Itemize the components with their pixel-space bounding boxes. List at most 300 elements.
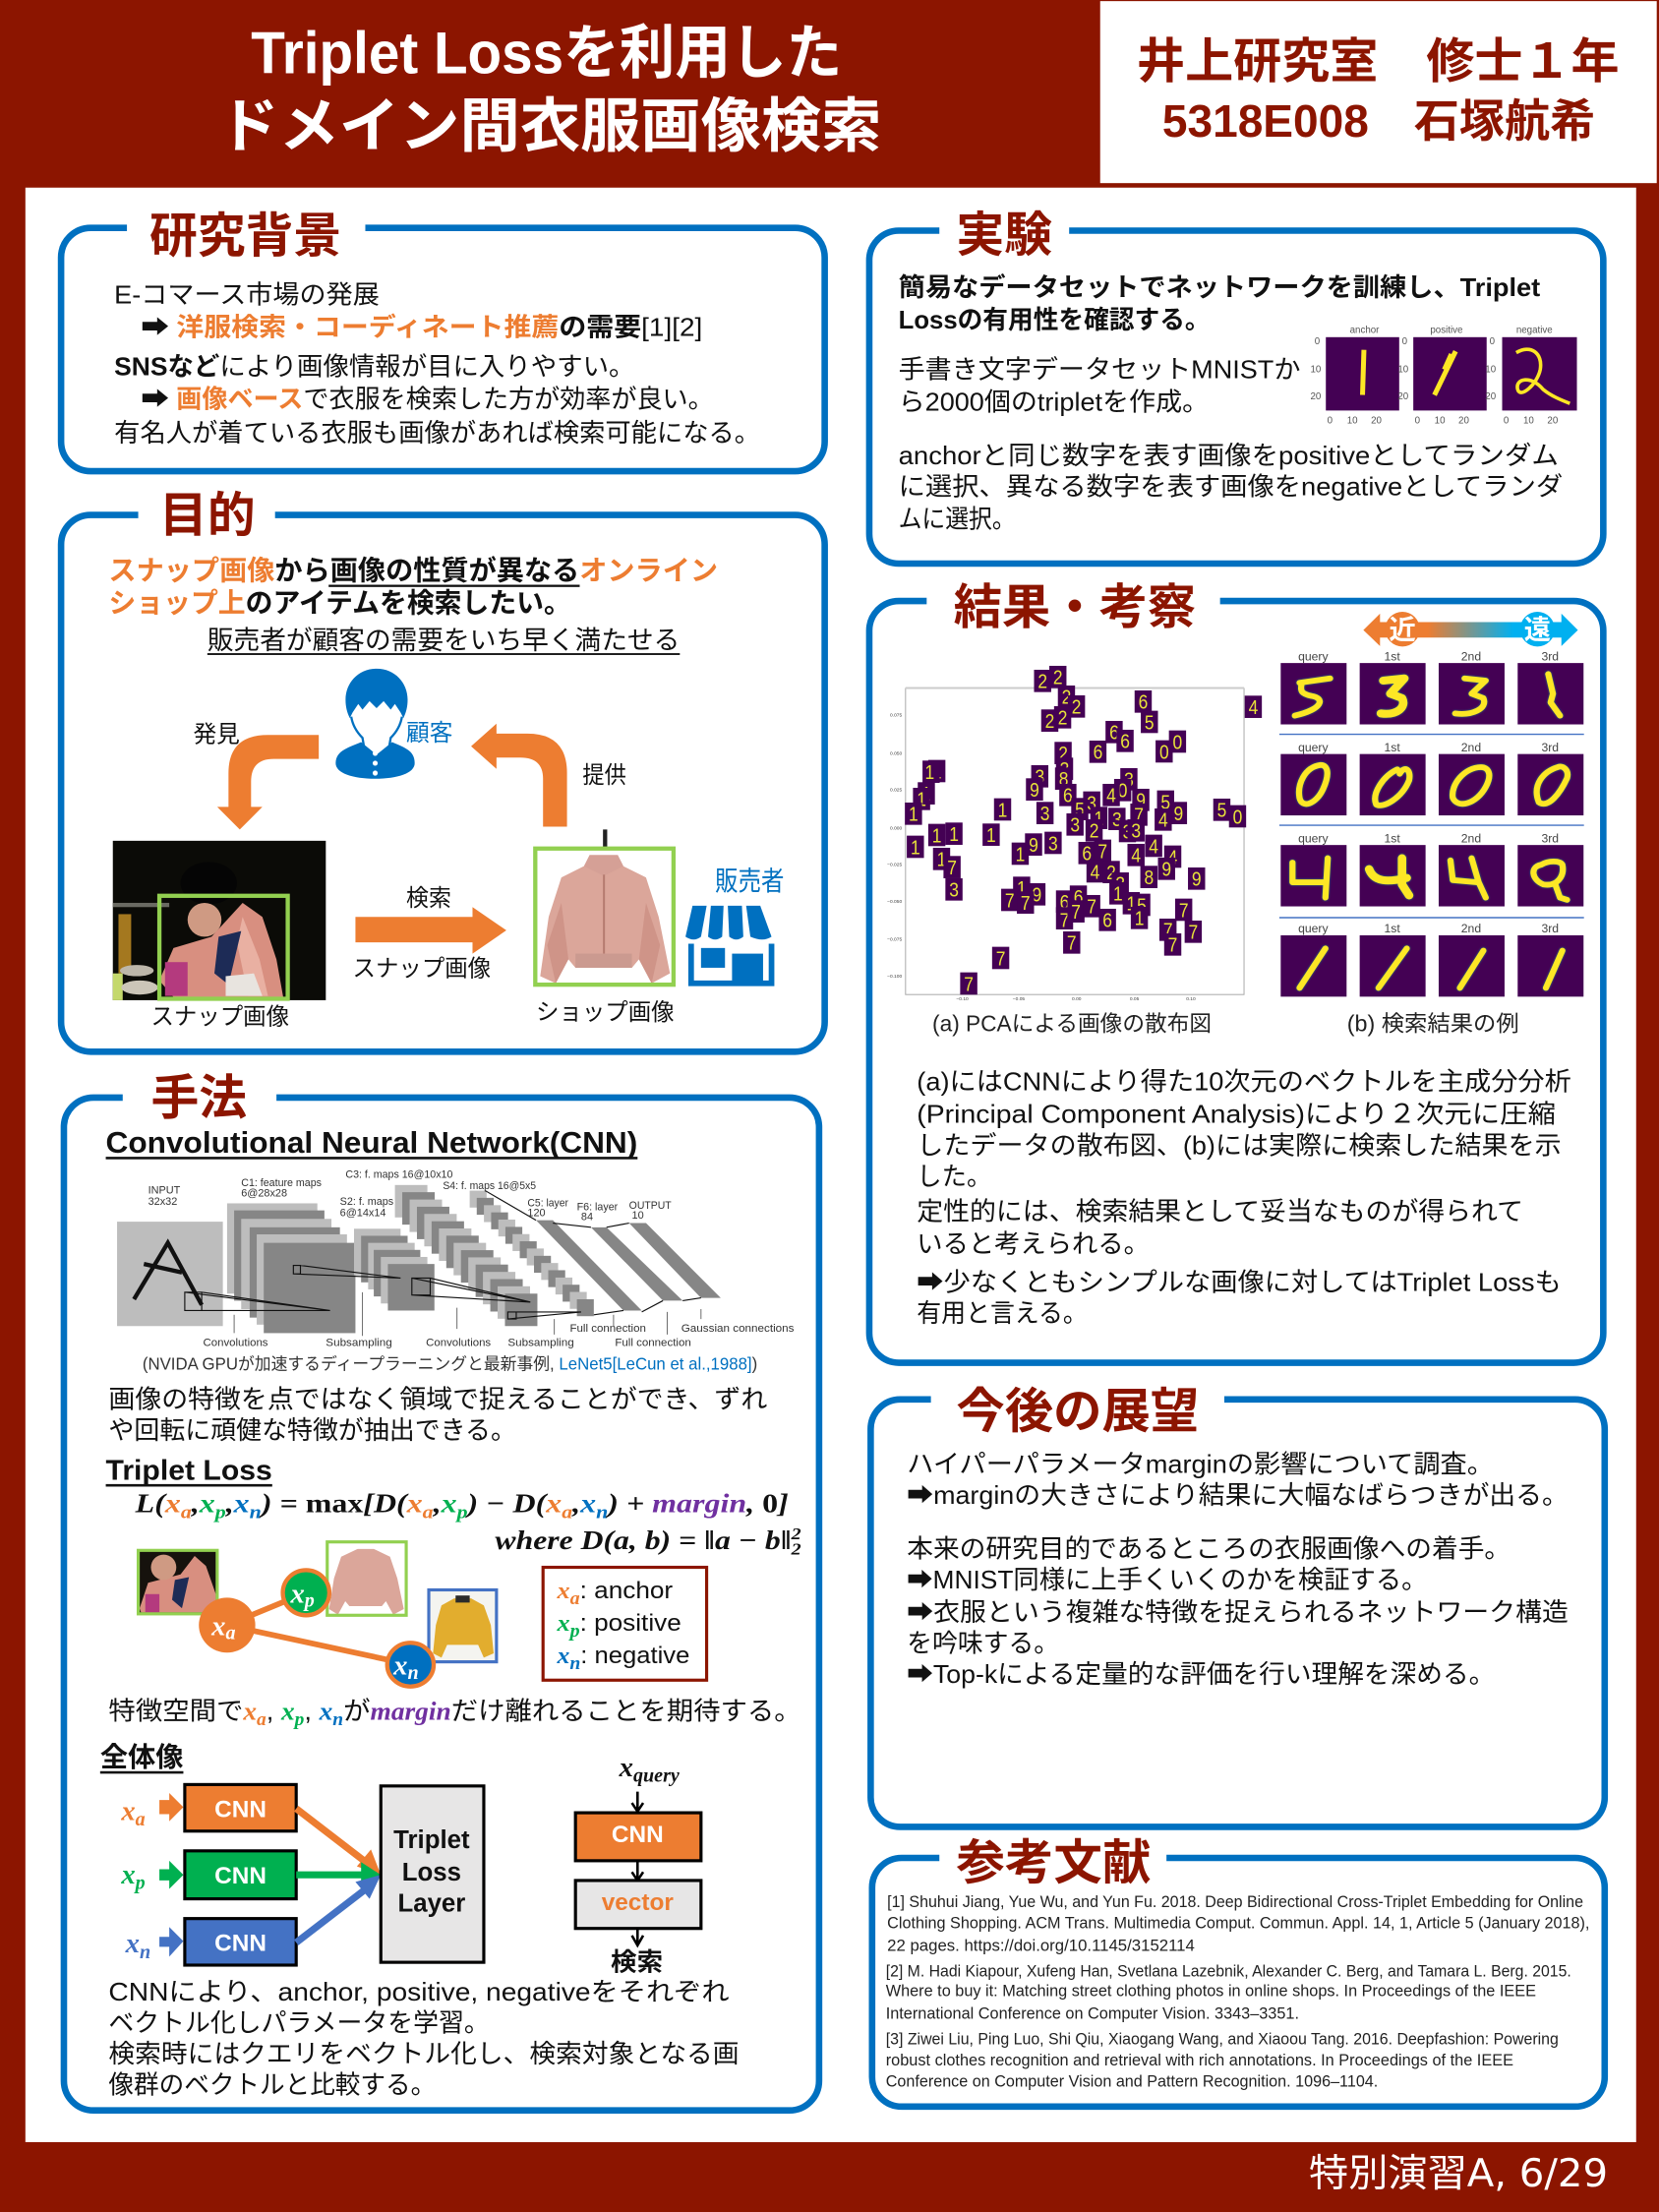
chart: LeNet5 architecture: 84 bbox=[581, 1212, 593, 1224]
formula: triplet loss: , bbox=[432, 1489, 442, 1519]
CNN blocks: CNN bbox=[214, 1796, 267, 1823]
loss layer: Loss bbox=[402, 1859, 461, 1886]
figure: MNIST triplet samples: 20 bbox=[1310, 391, 1322, 402]
heading: 目的: 目的 bbox=[159, 490, 256, 543]
chart: PCA scatter: 2 bbox=[1090, 820, 1098, 842]
figure: MNIST triplet samples: 10 bbox=[1397, 365, 1409, 376]
diagram: triplet embedding: x bbox=[290, 1578, 305, 1609]
figure: MNIST triplet samples: positive bbox=[1430, 325, 1462, 335]
legend: x bbox=[556, 1578, 580, 1609]
reference 1: 22 pages. https://doi.org/10.1145/3152114 bbox=[887, 1937, 1195, 1955]
figure: MNIST triplet samples: 20 bbox=[1371, 415, 1383, 426]
legend: x bbox=[556, 1610, 580, 1642]
chart: PCA scatter: 7 bbox=[1179, 900, 1189, 922]
text: results: したデータの散布図、(b)には実際に検索した結果を示 bbox=[917, 1130, 1562, 1160]
chart: PCA scatter: 3 bbox=[1123, 821, 1132, 843]
chart: PCA scatter: 4 bbox=[1168, 847, 1177, 868]
figure: MNIST triplet samples: 0 bbox=[1490, 336, 1496, 347]
chart: PCA scatter: 7 bbox=[1189, 922, 1198, 943]
panel: 実験 bbox=[869, 209, 1603, 564]
formula: triplet loss: a bbox=[423, 1502, 434, 1523]
row 1: query bbox=[1298, 649, 1329, 663]
heading: 全体像: 全体像 bbox=[100, 1742, 183, 1772]
arrow: near to far bbox=[1363, 612, 1578, 646]
reference 3: robust clothes recognition and retrieval with rich annotations. In Proceedings of the IEEE bbox=[886, 2051, 1513, 2069]
axis ticks: −0.025 bbox=[887, 863, 902, 868]
row 4: 2nd bbox=[1461, 922, 1481, 935]
text: network description: 検索時にはクエリをベクトル化し、検索対象となる画 bbox=[108, 2039, 740, 2068]
text: purpose bbox=[108, 555, 718, 655]
chart: PCA scatter: 2 bbox=[1072, 696, 1081, 718]
chart: PCA scatter: 1 bbox=[925, 761, 934, 784]
chart: PCA scatter: 4 bbox=[1106, 785, 1116, 807]
chart: PCA scatter: 3 bbox=[949, 879, 959, 901]
chart: LeNet5 architecture: Full connection bbox=[615, 1337, 691, 1348]
chart: PCA scatter: 4 bbox=[1249, 696, 1258, 719]
axis ticks: −0.05 bbox=[1013, 996, 1025, 1002]
formula: triplet loss bbox=[135, 1489, 801, 1559]
chart: LeNet5 architecture: Convolutions bbox=[204, 1337, 268, 1348]
reference 2 bbox=[886, 1961, 1571, 2022]
title bbox=[218, 20, 881, 159]
inputs: p bbox=[134, 1873, 146, 1894]
chart: PCA scatter: 6 bbox=[1063, 785, 1073, 807]
chart: LeNet5 architecture: INPUT bbox=[148, 1184, 181, 1196]
chart: PCA scatter: 3 bbox=[1124, 769, 1134, 791]
formula: triplet loss: x bbox=[199, 1489, 226, 1523]
diagram: triplet embedding: p bbox=[303, 1590, 315, 1612]
formula: triplet loss: ) − D( bbox=[464, 1489, 549, 1519]
arrows to loss layer bbox=[296, 1809, 381, 1943]
chart: PCA scatter: 6 bbox=[1109, 722, 1119, 744]
formula: triplet loss: x bbox=[545, 1489, 572, 1523]
reference 3 bbox=[886, 2029, 1559, 2090]
chart: PCA scatter: 7 bbox=[1060, 910, 1069, 931]
row 3 bbox=[1280, 831, 1583, 907]
text: purpose: 販売者が顧客の需要をいち早く満たせる bbox=[207, 626, 680, 655]
chart: LeNet5 architecture: 10 bbox=[632, 1210, 644, 1222]
text: background: 画像ベースで衣服を検索した方が効率が良い。 bbox=[176, 385, 714, 414]
figure: MNIST triplet samples: 20 bbox=[1397, 391, 1409, 402]
chart: PCA scatter: 7 bbox=[1134, 805, 1144, 826]
chart: PCA scatter: 3 bbox=[1087, 793, 1096, 814]
axis ticks: 0.075 bbox=[890, 713, 902, 719]
reference 1: [1] Shuhui Jiang, Yue Wu, and Yun Fu. 2018. Deep Bidirectional Cross-Triplet Embedding for Online bbox=[887, 1892, 1583, 1911]
formula: triplet loss: n bbox=[250, 1502, 262, 1523]
formula: triplet loss: x bbox=[233, 1489, 262, 1523]
text: experiment summary: 簡易なデータセットでネットワークを訓練し、Triplet bbox=[899, 272, 1541, 302]
figure: MNIST triplet samples: negative bbox=[1516, 325, 1553, 335]
row 2: query bbox=[1298, 741, 1329, 754]
legend: : negative bbox=[580, 1643, 689, 1669]
panel: 参考文献 bbox=[872, 1837, 1605, 2107]
chart: PCA scatter: 4 bbox=[1149, 836, 1158, 858]
legend bbox=[543, 1568, 707, 1680]
text: margin expectation: x bbox=[319, 1697, 343, 1730]
formula: triplet loss: , bbox=[191, 1489, 200, 1519]
icon: store bbox=[685, 906, 774, 986]
formula: triplet loss: x bbox=[440, 1489, 468, 1523]
formula: triplet loss: margin , 0] bbox=[652, 1489, 787, 1519]
text: experiment summary bbox=[899, 272, 1541, 334]
chart: PCA scatter: 1 bbox=[917, 789, 926, 810]
chart: PCA scatter: 2 bbox=[1045, 710, 1054, 733]
chart: PCA scatter: 2 bbox=[1053, 667, 1063, 688]
chart: PCA scatter: 0 bbox=[1233, 807, 1242, 828]
chart: PCA scatter: 3 bbox=[1035, 766, 1044, 788]
text: network description: 像群のベクトルと比較する。 bbox=[108, 2070, 436, 2100]
chart: PCA scatter: 0 bbox=[1173, 732, 1182, 753]
chart: PCA scatter: 7 bbox=[1168, 934, 1177, 956]
text: network description bbox=[108, 1977, 740, 2100]
chart: PCA scatter: 1 bbox=[1017, 877, 1027, 900]
chart: PCA scatter: 1 bbox=[1016, 844, 1025, 866]
label: snap image on arrow: スナップ画像 bbox=[353, 956, 491, 983]
text: triplet selection: anchorと同じ数字を表す画像をpositiveとしてランダム bbox=[899, 441, 1559, 470]
axis ticks bbox=[887, 713, 1196, 1002]
photo: snap image bbox=[113, 841, 326, 1000]
text: margin expectation: が bbox=[343, 1696, 371, 1725]
text: triplet selection: に選択、異なる数字を表す画像をnegativeとしてランダ bbox=[899, 471, 1563, 501]
formula: triplet loss: p bbox=[454, 1502, 468, 1523]
chart: LeNet5 architecture: F6: layer bbox=[577, 1202, 619, 1214]
formula: triplet loss: x bbox=[579, 1489, 608, 1523]
chart: PCA scatter: 2 bbox=[1058, 743, 1068, 765]
chart: PCA scatter: 7 bbox=[947, 857, 957, 879]
chart: PCA scatter: 7 bbox=[1005, 890, 1015, 912]
chart: PCA scatter: 4 bbox=[1158, 809, 1168, 831]
arrow: near to far: 遠 bbox=[1524, 615, 1551, 645]
formula: triplet loss: 2 bbox=[790, 1540, 801, 1559]
panel: 目的 bbox=[61, 490, 825, 1051]
row 4: 3rd bbox=[1541, 922, 1559, 935]
text: purpose: ショップ上のアイテムを検索したい。 bbox=[108, 587, 571, 618]
row 1: 3rd bbox=[1541, 649, 1559, 663]
figure: MNIST triplet samples: 10 bbox=[1310, 365, 1322, 376]
text: margin expectation: n bbox=[332, 1709, 343, 1730]
chart: PCA scatter: 7 bbox=[1021, 892, 1031, 915]
chart: LeNet5 architecture: S2: f. maps bbox=[340, 1196, 394, 1208]
figure: MNIST triplet samples: 0 bbox=[1315, 336, 1321, 347]
panel: 研究背景 bbox=[61, 210, 825, 471]
label: 検索: 検索 bbox=[406, 885, 451, 912]
figure: MNIST triplet samples: 0 bbox=[1415, 415, 1421, 426]
diagram: query flow: 検索 bbox=[611, 1948, 663, 1977]
chart: PCA scatter: 7 bbox=[1067, 932, 1077, 954]
chart: PCA scatter: 2 bbox=[1058, 707, 1067, 729]
chart: PCA scatter: 6 bbox=[1060, 891, 1069, 914]
diagram: query flow: x bbox=[620, 1752, 633, 1783]
author box bbox=[1100, 1, 1657, 183]
panel: 結果・考察 bbox=[869, 581, 1603, 1363]
figure: MNIST triplet samples: 10 bbox=[1523, 415, 1534, 426]
text: CNN description: や回転に頑健な特徴が抽出できる。 bbox=[108, 1415, 516, 1445]
chart: PCA scatter: 7 bbox=[996, 948, 1005, 970]
diagram: triplet embedding: x bbox=[211, 1610, 225, 1642]
figure: MNIST triplet samples: anchor bbox=[1350, 325, 1380, 335]
row 2: 2nd bbox=[1461, 741, 1481, 754]
diagram: triplet embedding: n bbox=[408, 1662, 419, 1684]
chart: PCA scatter: 6 bbox=[1102, 910, 1112, 931]
chart: LeNet5 architecture: Subsampling bbox=[507, 1337, 574, 1348]
chart: PCA scatter: 2 bbox=[1062, 687, 1071, 708]
loss layer: Triplet bbox=[393, 1826, 470, 1854]
chart: PCA scatter: 0 bbox=[1118, 780, 1127, 802]
text: results: (a)にはCNNにより得た10次元のベクトルを主成分分析 bbox=[917, 1067, 1571, 1097]
chart: PCA scatter: 1 bbox=[949, 823, 959, 846]
text: background: 有名人が着ている衣服も画像があれば検索可能になる。 bbox=[114, 418, 760, 448]
loss layer: Layer bbox=[397, 1889, 465, 1917]
chart: LeNet5 architecture: 6@28x28 bbox=[241, 1187, 287, 1199]
chart: LeNet5 architecture: C3: f. maps 16@10x10 bbox=[345, 1169, 452, 1181]
chart: PCA scatter: 5 bbox=[1145, 712, 1155, 734]
chart: PCA scatter: 9 bbox=[1033, 884, 1041, 906]
chart: PCA scatter: 1 bbox=[937, 849, 946, 870]
label: 顧客: 顧客 bbox=[406, 720, 452, 747]
chart: LeNet5 architecture: Subsampling bbox=[326, 1337, 392, 1348]
text: experiment summary: Lossの有用性を確認する。 bbox=[899, 305, 1211, 334]
chart: PCA scatter: 2 bbox=[1037, 671, 1047, 692]
formula: triplet loss: a bbox=[181, 1502, 192, 1523]
chart: PCA scatter: 6 bbox=[1120, 731, 1130, 752]
inputs bbox=[120, 1793, 183, 1963]
diagram: triplet embedding: x bbox=[393, 1650, 408, 1682]
heading: 結果・考察: 結果・考察 bbox=[954, 581, 1196, 634]
text: background: ➡ bbox=[141, 385, 169, 414]
thumbnail: anchor bbox=[139, 1550, 217, 1614]
text: results: 有用と言える。 bbox=[917, 1298, 1088, 1328]
heading: 今後の展望: 今後の展望 bbox=[956, 1386, 1199, 1439]
row 4: query bbox=[1298, 922, 1329, 935]
reference 2: International Conference on Computer Vision. 3343–3351. bbox=[886, 2003, 1299, 2022]
figure: MNIST triplet samples: 0 bbox=[1504, 415, 1510, 426]
formula: triplet loss: p bbox=[212, 1502, 226, 1523]
reference 3: Conference on Computer Vision and Pattern Recognition. 1096–1104. bbox=[886, 2071, 1378, 2090]
text: margin expectation: a bbox=[257, 1709, 267, 1730]
text: future work: を吟味する。 bbox=[907, 1629, 1059, 1658]
diagram: query flow: CNN bbox=[612, 1822, 664, 1848]
chart: PCA scatter: 6 bbox=[1082, 843, 1092, 865]
CNN blocks: CNN bbox=[214, 1931, 267, 1957]
formula: triplet loss: where D(a, b) = ‖a − b‖ bbox=[495, 1525, 749, 1555]
formula: triplet loss: , bbox=[225, 1489, 234, 1519]
row 2: 1st bbox=[1385, 741, 1400, 754]
chart: PCA scatter: 6 bbox=[1094, 742, 1102, 763]
text: results bbox=[917, 1067, 1571, 1328]
text: background bbox=[114, 279, 760, 448]
diagram: triplet embedding bbox=[139, 1542, 497, 1687]
text: margin expectation: 特徴空間で x bbox=[108, 1696, 256, 1725]
text: future work: ➡marginの大きさにより結果に大幅なばらつきが出る。 bbox=[907, 1480, 1569, 1510]
icon: customer bbox=[335, 669, 415, 779]
text: background: ➡ bbox=[141, 312, 169, 341]
chart: PCA scatter: 9 bbox=[1192, 868, 1202, 890]
figure: MNIST triplet samples: 0 bbox=[1328, 415, 1333, 426]
chart: PCA scatter: 7 bbox=[1163, 920, 1173, 941]
chart: PCA scatter bbox=[887, 666, 1262, 1002]
chart: PCA scatter: 4 bbox=[1131, 845, 1141, 867]
author box: 井上研究室 修士１年 bbox=[1137, 35, 1620, 89]
diagram: query flow: vector bbox=[602, 1889, 674, 1916]
formula: triplet loss: a bbox=[562, 1502, 572, 1523]
chart: LeNet5 architecture: S4: f. maps 16@5x5 bbox=[443, 1180, 536, 1192]
diagram: triplet embedding: a bbox=[225, 1623, 236, 1644]
formula: triplet loss: 2 bbox=[790, 1524, 801, 1543]
axis ticks: 0.050 bbox=[890, 750, 902, 756]
chart: PCA scatter: 8 bbox=[1059, 768, 1068, 791]
caption: LeNet source: (NVIDA GPUが加速するディープラーニングと最新事例, LeNet5[LeCun et al.,1988]) bbox=[143, 1354, 757, 1374]
heading: Triplet Loss: Triplet Loss bbox=[106, 1456, 272, 1487]
loss layer bbox=[381, 1786, 484, 1962]
chart: PCA scatter: 7 bbox=[964, 974, 974, 995]
chart: PCA scatter: 9 bbox=[1173, 803, 1183, 825]
figure: MNIST triplet samples: 10 bbox=[1435, 415, 1446, 426]
chart: PCA scatter: 1 bbox=[932, 761, 941, 783]
footer label: 特別演習A, 6/29 bbox=[1309, 2152, 1608, 2196]
chart: PCA scatter: 5 bbox=[1217, 800, 1226, 821]
axis ticks: 0.000 bbox=[890, 825, 902, 831]
chart: PCA scatter: 9 bbox=[1161, 859, 1171, 880]
label: snap image: スナップ画像 bbox=[150, 1003, 289, 1030]
heading: 参考文献: 参考文献 bbox=[956, 1837, 1151, 1890]
text: margin expectation: p bbox=[293, 1709, 304, 1730]
axis ticks: −0.075 bbox=[887, 937, 902, 943]
arrow: search bbox=[355, 907, 506, 954]
row 2: 3rd bbox=[1541, 741, 1559, 754]
row 4 bbox=[1280, 922, 1583, 996]
text: triplet selection bbox=[899, 441, 1563, 533]
axis ticks: −0.050 bbox=[887, 899, 902, 905]
figure: MNIST triplet samples: 20 bbox=[1485, 391, 1497, 402]
arrow: near to far: 近 bbox=[1389, 615, 1416, 645]
chart: PCA scatter: 5 bbox=[1137, 895, 1147, 917]
chart: LeNet5 architecture: Gaussian connections bbox=[681, 1323, 795, 1335]
text: network description: ベクトル化しパラメータを学習。 bbox=[108, 2007, 490, 2037]
legend: : anchor bbox=[580, 1578, 673, 1604]
text: CNN description: 画像の特徴を点ではなく領域で捉えることができ、ずれ bbox=[108, 1384, 767, 1413]
legend: x bbox=[556, 1643, 580, 1674]
row 3: 1st bbox=[1385, 831, 1400, 845]
title: ドメイン間衣服画像検索 bbox=[218, 92, 881, 159]
inputs: x bbox=[126, 1928, 140, 1959]
text: results: (Principal Component Analysis)により２次元に圧縮 bbox=[917, 1100, 1556, 1129]
label: 販売者: 販売者 bbox=[715, 866, 784, 896]
chart: PCA scatter: 6 bbox=[1074, 886, 1083, 909]
figure: MNIST triplet samples: 0 bbox=[1402, 336, 1408, 347]
chart: LeNet5 architecture: 32x32 bbox=[148, 1196, 177, 1208]
text: results: ➡少なくともシンプルな画像に対してはTriplet Lossも bbox=[917, 1267, 1562, 1296]
chart: PCA scatter: 3 bbox=[1048, 833, 1058, 855]
row 1: 2nd bbox=[1461, 649, 1481, 663]
axis ticks: 0.025 bbox=[890, 788, 902, 794]
chart: PCA scatter: 9 bbox=[1029, 834, 1038, 857]
chart: PCA scatter: 1 bbox=[1135, 908, 1144, 929]
figure: MNIST triplet samples: 20 bbox=[1458, 415, 1469, 426]
chart: LeNet5 architecture: 120 bbox=[527, 1207, 546, 1219]
legend: a bbox=[570, 1588, 580, 1609]
text: purpose: スナップ画像から画像の性質が異なるオンライン bbox=[108, 555, 718, 586]
text: margin expectation: x bbox=[280, 1697, 304, 1730]
inputs: x bbox=[121, 1859, 136, 1890]
arrow: discover bbox=[217, 735, 319, 829]
chart: PCA scatter: 6 bbox=[1139, 691, 1148, 713]
axis ticks: 0.00 bbox=[1072, 996, 1082, 1002]
text: results: した。 bbox=[917, 1162, 991, 1191]
caption: (a): (a) PCAによる画像の散布図 bbox=[932, 1010, 1212, 1036]
chart: LeNet5 architecture: C5: layer bbox=[527, 1197, 568, 1209]
figure: MNIST triplet samples: 10 bbox=[1347, 415, 1358, 426]
chart: LeNet5 architecture: 6@14x14 bbox=[340, 1207, 385, 1219]
text: network description: CNNにより、anchor, positive, negativeをそれぞれ bbox=[108, 1977, 730, 2006]
reference 1: Clothing Shopping. ACM Trans. Multimedia Comput. Commun. Appl. 14, 1, Article 5 (January 2018), bbox=[887, 1914, 1589, 1933]
chart: PCA scatter: 7 bbox=[1071, 901, 1081, 924]
diagram: query flow: query bbox=[633, 1765, 680, 1787]
text: margin expectation: , bbox=[267, 1696, 281, 1725]
text: future work: ➡衣服という複雑な特徴を捉えられるネットワーク構造 bbox=[907, 1597, 1569, 1627]
reference 1 bbox=[887, 1892, 1589, 1955]
chart: PCA scatter: 3 bbox=[1070, 814, 1080, 836]
heading: CNN: Convolutional Neural Network(CNN) bbox=[106, 1127, 637, 1160]
formula: triplet loss: n bbox=[596, 1502, 608, 1523]
chart: LeNet5 architecture: C1: feature maps bbox=[241, 1177, 323, 1189]
legend: n bbox=[569, 1653, 580, 1674]
author box: 5318E008 石塚航希 bbox=[1162, 95, 1595, 147]
chart: PCA scatter: 1 bbox=[998, 800, 1007, 821]
chart: PCA scatter: 5 bbox=[1160, 792, 1170, 813]
thumbnail: positive bbox=[327, 1542, 406, 1615]
figure: MNIST triplet samples bbox=[1310, 325, 1577, 426]
reference 2: [2] M. Hadi Kiapour, Xufeng Han, Svetlana Lazebnik, Alexander C. Berg, and Tamara L. Berg. 2015. bbox=[886, 1961, 1571, 1980]
chart: PCA scatter: 3 bbox=[1060, 758, 1069, 781]
chart: PCA scatter: 1 bbox=[1127, 893, 1136, 915]
row 4: 1st bbox=[1385, 922, 1400, 935]
inputs: a bbox=[136, 1809, 146, 1830]
chart: PCA scatter: 9 bbox=[1030, 779, 1039, 802]
axis ticks: −0.10 bbox=[956, 996, 969, 1002]
chart: LeNet5 architecture bbox=[117, 1169, 795, 1348]
heading: 研究背景: 研究背景 bbox=[149, 210, 341, 264]
chart: PCA scatter: 1 bbox=[921, 783, 931, 806]
text: background: SNSなどにより画像情報が目に入りやすい。 bbox=[114, 352, 634, 382]
formula: triplet loss: ) + bbox=[605, 1489, 652, 1519]
CNN blocks: CNN bbox=[214, 1863, 267, 1889]
thumbnail: negative bbox=[429, 1589, 497, 1662]
photo: shop image bbox=[535, 829, 674, 985]
label: 発見: 発見 bbox=[193, 721, 240, 747]
title: Triplet Lossを利用した bbox=[251, 20, 842, 87]
axis ticks: 0.05 bbox=[1130, 996, 1140, 1002]
text: margin expectation: marginだけ離れることを期待する。 bbox=[371, 1696, 787, 1725]
text: future work: 本来の研究目的であるところの衣服画像への着手。 bbox=[907, 1533, 1511, 1563]
text: future work: ➡MNIST同様に上手くいくのかを検証する。 bbox=[907, 1565, 1427, 1594]
text: margin expectation: , bbox=[304, 1696, 320, 1725]
chart: PCA scatter: 3 bbox=[1115, 873, 1125, 895]
chart: PCA scatter: 1 bbox=[909, 804, 918, 825]
diagram: training network bbox=[120, 1784, 484, 1965]
text: background: 洋服検索・コーディネート推薦 の需要 [1][2] bbox=[176, 312, 702, 341]
formula: triplet loss: ) = bbox=[258, 1489, 306, 1519]
formula: triplet loss: , bbox=[571, 1489, 580, 1519]
text: CNN description bbox=[108, 1384, 767, 1445]
legend: p bbox=[567, 1621, 580, 1642]
chart: LeNet5 architecture: Full connection bbox=[569, 1323, 646, 1335]
chart: PCA scatter: 9 bbox=[1136, 790, 1146, 811]
reference 3: [3] Ziwei Liu, Ping Luo, Shi Qiu, Xiaogang Wang, and Xiaoou Tang. 2016. Deepfashion: Powering bbox=[886, 2029, 1559, 2048]
chart: PCA scatter: 0 bbox=[1159, 742, 1169, 763]
chart: PCA scatter: 4 bbox=[1091, 862, 1099, 883]
text: future work bbox=[907, 1449, 1569, 1689]
legend: : positive bbox=[580, 1610, 681, 1637]
